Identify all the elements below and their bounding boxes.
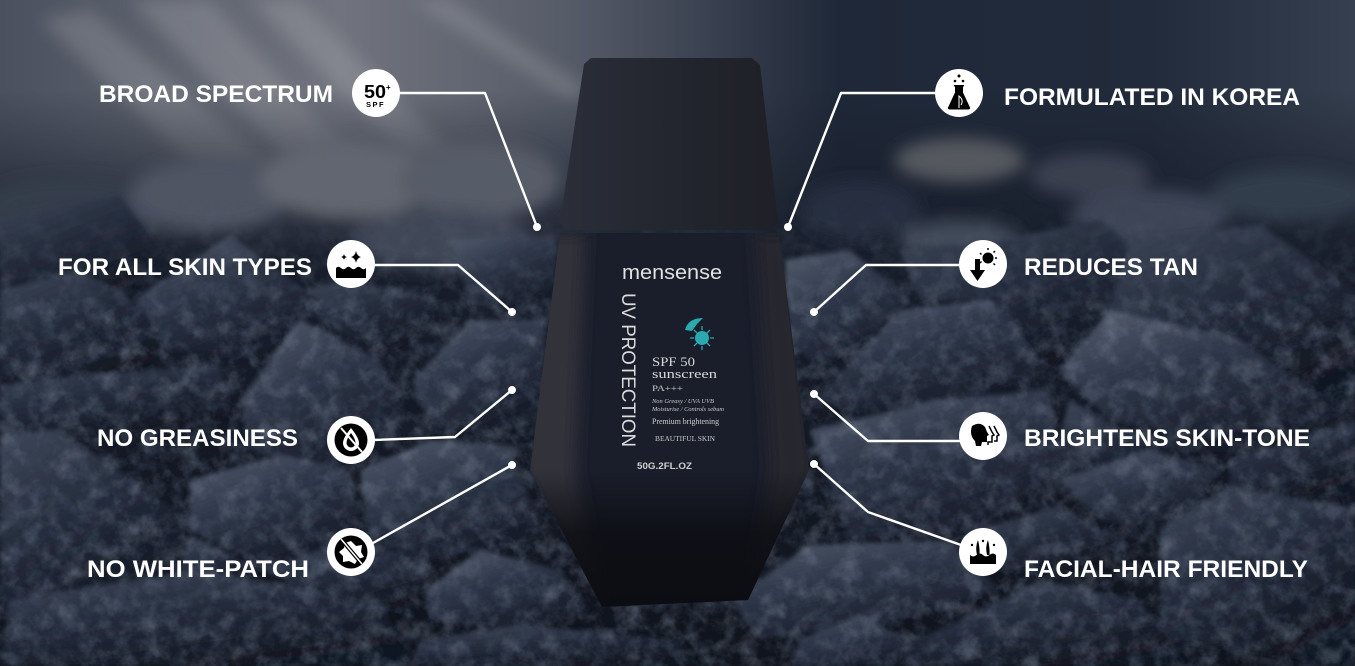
icon: flask with leaf [935,69,983,117]
callout: facial-hair friendly [810,460,1308,583]
icon: SPF 50 badge: 50 [364,82,386,102]
connector dot [810,308,818,316]
SPF heading: SPF 50 [652,354,695,369]
label: BROAD SPECTRUM [99,81,333,108]
callout: reduces tan [810,240,1198,316]
callout: formulated in Korea [784,69,1300,231]
label: REDUCES TAN [1024,254,1198,281]
icon: face profiles [959,412,1007,460]
connector line [373,465,512,543]
connector line [814,265,961,312]
feature line 2: Moisturise / Controls sebum [651,406,724,413]
label: BRIGHTENS SKIN-TONE [1024,425,1310,452]
icon: SPF 50 badge: + [386,83,391,92]
icon: sun and down arrow [959,240,1007,288]
connector line [814,394,961,441]
sunscreen heading: sunscreen [652,366,718,381]
label: FOR ALL SKIN TYPES [58,254,312,281]
callout: for all skin types [58,240,516,316]
icon: SPF 50 badge [352,69,400,117]
connector line [373,265,512,312]
icon: skin layers [327,240,375,288]
icon: umbrella and sun [685,318,714,350]
connector line [814,464,961,545]
icon: hair follicles [959,528,1007,576]
connector dot [784,223,792,231]
bottle body [530,233,809,607]
connector dot [533,223,541,231]
callout: brightens skin-tone [810,390,1310,460]
product bottle [520,58,820,610]
vertical UV protection label: UV PROTECTION [617,293,638,447]
label: NO GREASINESS [97,425,298,452]
icon: SPF 50 badge: SPF [366,100,385,109]
connector dot [810,390,818,398]
label: FACIAL-HAIR FRIENDLY [1024,556,1308,583]
connector dot [508,308,516,316]
PA rating: PA+++ [652,384,684,393]
callout: broad spectrum [99,69,541,231]
foreground rocks [0,195,1355,666]
net weight: 50G.2FL.OZ [637,461,693,471]
connector line [398,93,537,227]
connector dot [508,461,516,469]
feature line 1: Non Greasy / UVA UVB [651,398,714,405]
rock texture [0,226,1355,666]
connector line [373,390,512,440]
label: FORMULATED IN KOREA [1004,84,1300,111]
icon: crossed patch [327,528,375,576]
icon: crossed drop [327,416,375,464]
callout: no white patch [87,461,516,583]
callout: no greasiness [97,386,516,464]
connector dot [810,460,818,468]
brand name: mensense [622,262,722,284]
connector line [788,93,937,227]
label: NO WHITE-PATCH [87,556,309,583]
body shading [520,233,820,610]
feature line 4: BEAUTIFUL SKIN [655,435,715,443]
feature line 3: Premium brightening [652,417,719,426]
bottle cap [560,58,778,230]
connector dot [508,386,516,394]
distant blurred rocks [0,138,1355,284]
